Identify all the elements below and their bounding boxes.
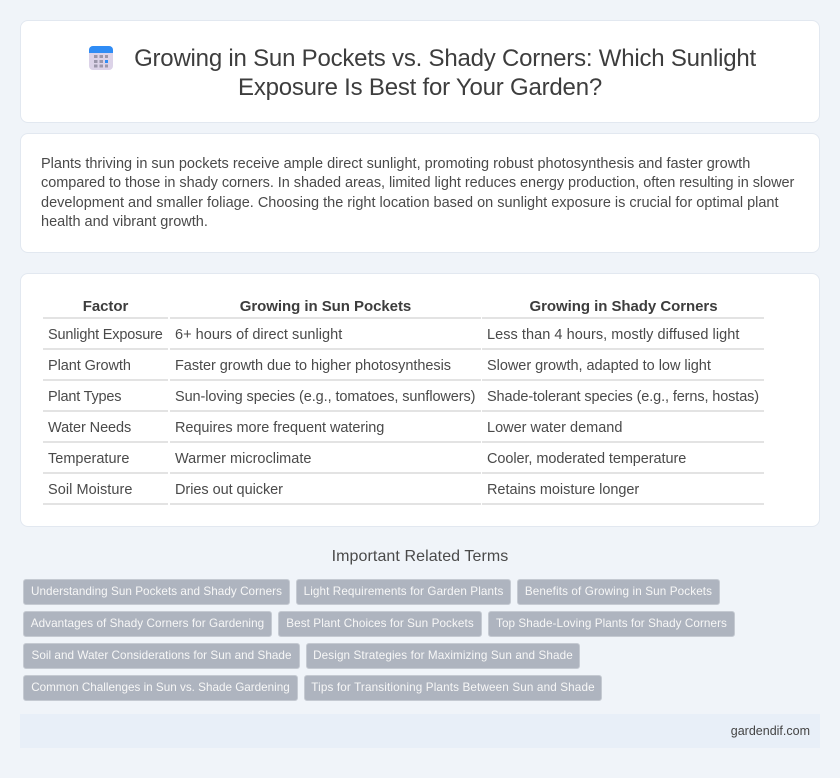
panel: introduction (20, 133, 820, 253)
text block: introduction (41, 156, 794, 230)
row: water needs: Water Needs (48, 420, 131, 436)
row: sunlight exposure: Less than 4 hours, mostly diffused light (487, 327, 739, 343)
related term tags: Advantages of Shady Corners for Gardening (31, 617, 264, 630)
row: plant growth: Faster growth due to higher photosynthesis (175, 358, 451, 374)
text block: introduction: Plants thriving in sun pockets receive ample direct sunlight, promoting robust photosynthesis and faster growth (41, 156, 750, 172)
footer bar (20, 714, 820, 748)
row: water needs: Lower water demand (487, 420, 622, 436)
row: water needs: Requires more frequent watering (175, 420, 384, 436)
row: plant types: Sun-loving species (e.g., tomatoes, sunflowers) (175, 389, 475, 405)
row: plant types: Shade-tolerant species (e.g., ferns, hostas) (487, 389, 759, 405)
panel: header (20, 20, 820, 123)
row: temperature (48, 451, 686, 467)
text block: introduction: health and vibrant growth. (41, 214, 208, 230)
row: soil moisture: Soil Moisture (48, 482, 132, 498)
heading: important related terms: Important Related Terms (332, 548, 508, 565)
row: plant growth: Plant Growth (48, 358, 131, 374)
row: water needs (48, 420, 622, 436)
related term tags: Light Requirements for Garden Plants (304, 585, 503, 598)
title (134, 45, 756, 101)
related term tags: Design Strategies for Maximizing Sun and Shade (313, 649, 573, 662)
comparison table (43, 298, 764, 505)
row: plant growth (48, 358, 711, 374)
row: temperature: Temperature (48, 451, 129, 467)
related term tags: Understanding Sun Pockets and Shady Corners (31, 585, 282, 598)
title: Growing in Sun Pockets vs. Shady Corners: Which Sunlight (134, 45, 756, 72)
footer source: gardendif.com (731, 724, 810, 738)
related term tags: Common Challenges in Sun vs. Shade Gardening (31, 681, 290, 694)
related term tags: Benefits of Growing in Sun Pockets (525, 585, 712, 598)
row: sunlight exposure (48, 327, 740, 343)
table header: Growing in Sun Pockets (240, 298, 411, 315)
text block: introduction: development and smaller foliage. Choosing the right location based on sunlight exposure is crucial for optimal plant (41, 195, 779, 211)
row: sunlight exposure: Sunlight Exposure (48, 327, 163, 343)
text block: introduction: compared to those in shady corners. In shaded areas, limited light reduces energy production, often resulting in slower (41, 175, 794, 191)
row: soil moisture: Retains moisture longer (487, 482, 639, 498)
related term tags: Tips for Transitioning Plants Between Sun and Shade (311, 681, 595, 694)
row: temperature: Warmer microclimate (175, 451, 311, 467)
panel: comparison table (20, 273, 820, 527)
table header: Factor (83, 298, 128, 315)
table header: Growing in Shady Corners (530, 298, 718, 315)
row: plant types (48, 389, 759, 405)
related term tags: Soil and Water Considerations for Sun and Shade (31, 649, 292, 662)
icon: calendar (89, 46, 113, 70)
row: temperature: Cooler, moderated temperature (487, 451, 686, 467)
related term tags: Best Plant Choices for Sun Pockets (286, 617, 474, 630)
row: soil moisture: Dries out quicker (175, 482, 283, 498)
row: soil moisture (48, 482, 639, 498)
row: sunlight exposure: 6+ hours of direct sunlight (175, 327, 342, 343)
row: plant growth: Slower growth, adapted to low light (487, 358, 711, 374)
table header (83, 298, 718, 315)
related term tags: Top Shade-Loving Plants for Shady Corners (496, 617, 727, 630)
title: Exposure Is Best for Your Garden? (238, 74, 602, 101)
related term tags (23, 579, 735, 701)
row: plant types: Plant Types (48, 389, 121, 405)
